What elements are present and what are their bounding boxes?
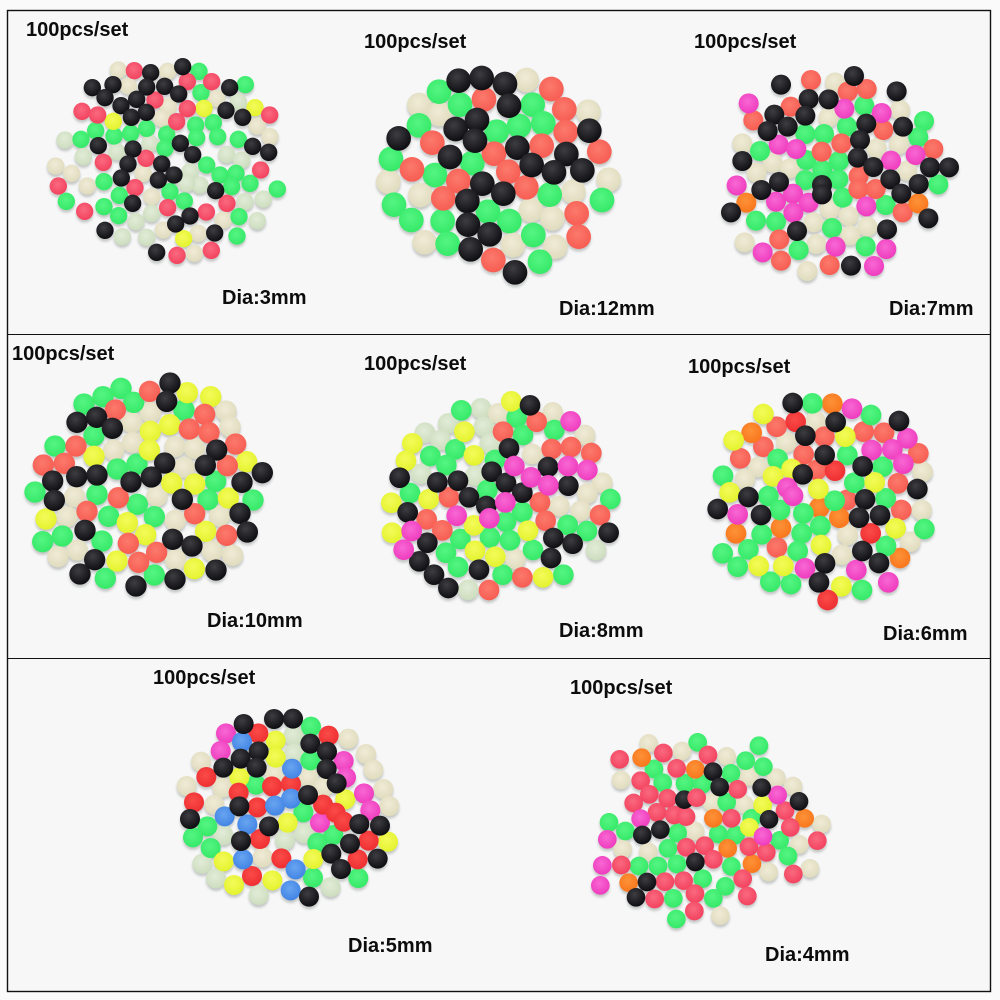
panel: 4mm beads — [570, 677, 849, 966]
label: diameter 7mm: Dia:7mm — [889, 298, 973, 320]
heading: 8mm quantity: 100pcs/set — [364, 353, 467, 375]
bead cluster: 6mm — [707, 393, 935, 610]
panel: 10mm beads — [12, 343, 303, 632]
bead cluster: 5mm — [177, 709, 399, 907]
label: diameter 3mm: Dia:3mm — [222, 287, 306, 309]
label: diameter 8mm: Dia:8mm — [559, 620, 643, 642]
bead cluster: 8mm — [381, 391, 621, 600]
heading: 6mm quantity: 100pcs/set — [688, 356, 791, 378]
panel: 6mm beads — [688, 356, 967, 645]
heading: 10mm quantity: 100pcs/set — [12, 343, 115, 365]
panel: 8mm beads — [364, 353, 643, 642]
panel: 7mm beads — [694, 31, 973, 320]
panel: 5mm beads — [153, 667, 432, 957]
label: diameter 4mm: Dia:4mm — [765, 944, 849, 966]
bead cluster: 3mm — [47, 58, 286, 264]
label: diameter 12mm: Dia:12mm — [559, 298, 655, 320]
heading: 12mm quantity: 100pcs/set — [364, 31, 467, 53]
bead cluster: 12mm — [376, 66, 621, 285]
heading: 5mm quantity: 100pcs/set — [153, 667, 256, 689]
heading: 4mm quantity: 100pcs/set — [570, 677, 673, 699]
label: diameter 5mm: Dia:5mm — [348, 935, 432, 957]
heading: 7mm quantity: 100pcs/set — [694, 31, 797, 53]
bead cluster: 7mm — [721, 66, 959, 281]
bead cluster: 4mm — [591, 733, 831, 928]
label: diameter 6mm: Dia:6mm — [883, 623, 967, 645]
panel: 3mm beads — [26, 19, 306, 309]
label: diameter 10mm: Dia:10mm — [207, 610, 303, 632]
panel: 12mm beads — [364, 31, 655, 320]
bead cluster: 10mm — [24, 372, 273, 597]
heading: 3mm quantity: 100pcs/set — [26, 19, 129, 41]
